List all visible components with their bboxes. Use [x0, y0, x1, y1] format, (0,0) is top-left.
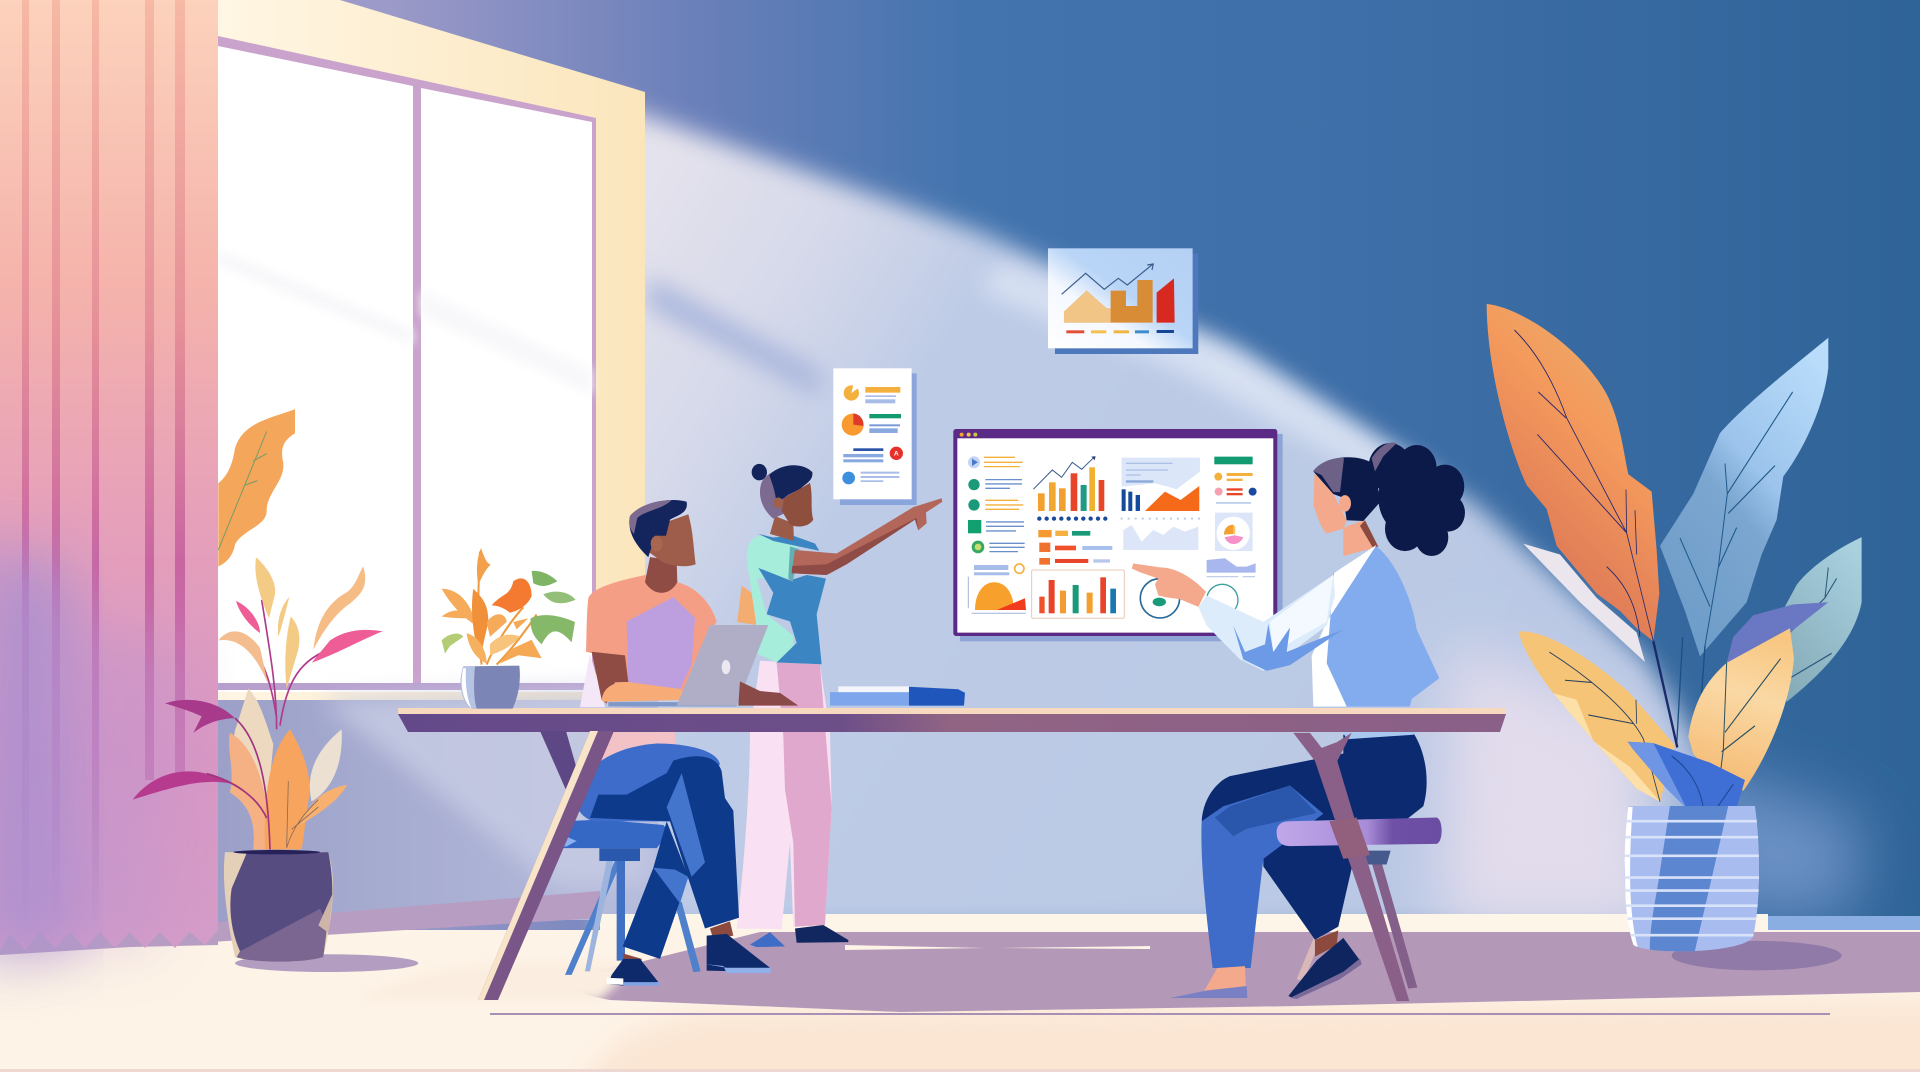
shoes [750, 925, 848, 947]
leaves: magenta drooping [133, 700, 270, 850]
pointing arm [792, 498, 942, 575]
leaf: cream back [1523, 544, 1645, 662]
white shirt edge [580, 654, 605, 707]
third column charts [1122, 458, 1200, 550]
shirt [586, 575, 717, 704]
head [629, 500, 696, 566]
wall light streak under window [320, 690, 650, 890]
window with frame and panes [218, 0, 645, 700]
semicircle chart [968, 564, 1026, 613]
table [398, 708, 1506, 1001]
poster shadow [1055, 253, 1198, 354]
shoes [607, 921, 771, 986]
trousers [577, 744, 739, 959]
trousers [1201, 733, 1427, 968]
neck [1343, 520, 1378, 556]
right plant [1487, 304, 1862, 970]
leaves: tall pink and peach [218, 557, 383, 729]
top poster: area chart [1048, 248, 1198, 354]
neck [770, 516, 794, 541]
blouse [1198, 545, 1439, 739]
bar and line chart [1033, 456, 1105, 519]
small potted plant on table [442, 548, 576, 709]
head [752, 464, 813, 527]
window wall below sill [218, 680, 658, 920]
book stack on table [830, 686, 965, 706]
ponytail [1368, 443, 1465, 556]
light beam on wall [600, 100, 1860, 930]
leaves: lower peach base [229, 689, 347, 850]
leaf: large orange behind window [218, 409, 295, 566]
report icons and lines: A [894, 451, 899, 458]
shadow: left pot [235, 954, 418, 972]
left poster: report [833, 368, 917, 505]
poster sheet [1048, 248, 1193, 348]
pot: dark planter [224, 850, 333, 962]
seated man [577, 500, 798, 986]
leaf: yellow right [1688, 628, 1794, 808]
small pot [461, 666, 520, 709]
pointing hand [1132, 564, 1206, 607]
leaf: blue front [1628, 742, 1745, 808]
shadow: right pot [1672, 941, 1842, 970]
left chair [560, 820, 701, 975]
right chair [1297, 851, 1417, 989]
board frame [953, 429, 1277, 636]
laptop [608, 625, 798, 706]
leaf: purple [1727, 602, 1828, 663]
list column [968, 456, 1025, 553]
right seat [1277, 817, 1442, 846]
white undershirt below table [593, 732, 675, 764]
sprig leaves [442, 548, 576, 665]
leaf: yellow left [1518, 631, 1675, 802]
right legs [1293, 733, 1409, 1001]
pot: striped planter [1624, 806, 1759, 952]
curtain [0, 0, 218, 960]
main stem [1653, 641, 1677, 747]
floor [0, 891, 1920, 1072]
poster shadow [840, 373, 917, 505]
baseboard [600, 914, 1920, 932]
board screen [957, 438, 1273, 633]
seated woman [1132, 442, 1465, 999]
leaf: blue [1660, 338, 1828, 745]
board shadow [960, 434, 1283, 641]
horizontal bars [1038, 530, 1112, 565]
neck [645, 557, 677, 593]
whiteboard dashboard [953, 429, 1283, 641]
standing woman [737, 464, 942, 947]
head [1313, 442, 1397, 533]
window dots [960, 433, 977, 437]
left floor plant and pot [133, 409, 418, 972]
trend line arrow [1062, 264, 1153, 294]
feet [1170, 930, 1362, 999]
blouse [747, 534, 826, 664]
boxed bar chart [1032, 570, 1124, 618]
leaf: large orange [1487, 304, 1659, 641]
trousers [737, 661, 832, 929]
right column widgets [1140, 457, 1257, 618]
area and bars [1064, 278, 1175, 323]
left legs [478, 731, 614, 1000]
tabletop [398, 708, 1506, 732]
back arm [737, 586, 757, 625]
leaf: teal [1773, 537, 1862, 702]
legend dashes [1066, 330, 1174, 333]
poster sheet [833, 368, 912, 499]
